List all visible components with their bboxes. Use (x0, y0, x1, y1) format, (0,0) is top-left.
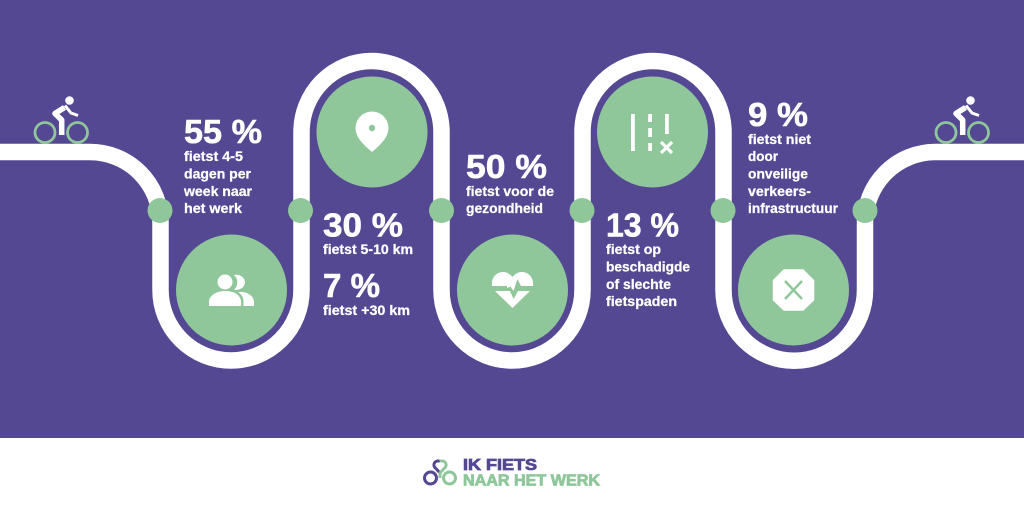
stat: 55 %: week naar (183, 184, 253, 199)
stat: 7 %: fietst +30 km (323, 303, 410, 318)
stat: 9 %: verkeers- (748, 184, 811, 199)
stat: 55 %: fietst 4-5 (184, 149, 243, 164)
logo (424, 457, 600, 490)
stat: 50 %: fietst voor de (466, 184, 554, 199)
stat: 9 % (748, 97, 839, 216)
icon: cyclist left (35, 96, 88, 142)
stat: 55 %: 55 % (184, 114, 262, 151)
stat: 30 %: 30 % (323, 208, 403, 244)
logo icon (424, 461, 456, 484)
stat: 13 %: of slechte (606, 277, 671, 292)
stat: 13 %: fietspaden (606, 294, 677, 309)
stat: 9 %: 9 % (748, 97, 808, 134)
winding cycling route (0, 61, 1024, 361)
icon circle: stop sign (738, 234, 849, 346)
stat: 9 %: fietst niet (748, 132, 811, 147)
stat: 9 %: door (748, 149, 779, 164)
icon circle: people (176, 234, 287, 346)
stat: 50 % (466, 149, 554, 216)
stat: 13 %: 13 % (606, 208, 679, 244)
icon: cyclist right (936, 96, 988, 142)
icon circle: heart with pulse (457, 234, 568, 346)
stat: 13 % (606, 208, 690, 309)
stat: 9 %: infrastructuur (748, 201, 839, 216)
stat: 13 %: fietst op (606, 242, 661, 257)
footer panel (0, 438, 1024, 512)
stat: 55 % (183, 114, 262, 216)
stat: 7 % (323, 268, 410, 318)
stat: 50 %: 50 % (466, 149, 547, 186)
stat: 55 %: het werk (184, 201, 242, 216)
stat: 30 %: fietst 5-10 km (323, 242, 413, 257)
stat: 9 %: onveilige (748, 166, 808, 182)
logo text (463, 457, 600, 490)
stat: 13 %: beschadigde (606, 260, 690, 274)
stat: 30 % (323, 208, 413, 257)
route waypoint dots (148, 198, 878, 223)
icon circle: damaged bike path (597, 76, 708, 188)
logo text: NAAR HET WERK (463, 472, 600, 490)
stat: 7 %: 7 % (323, 268, 380, 305)
stat: 55 %: dagen per (184, 166, 252, 182)
stat: 50 %: gezondheid (466, 201, 543, 216)
logo text: IK FIETS (463, 457, 537, 474)
icon circle: location pin (316, 76, 428, 188)
